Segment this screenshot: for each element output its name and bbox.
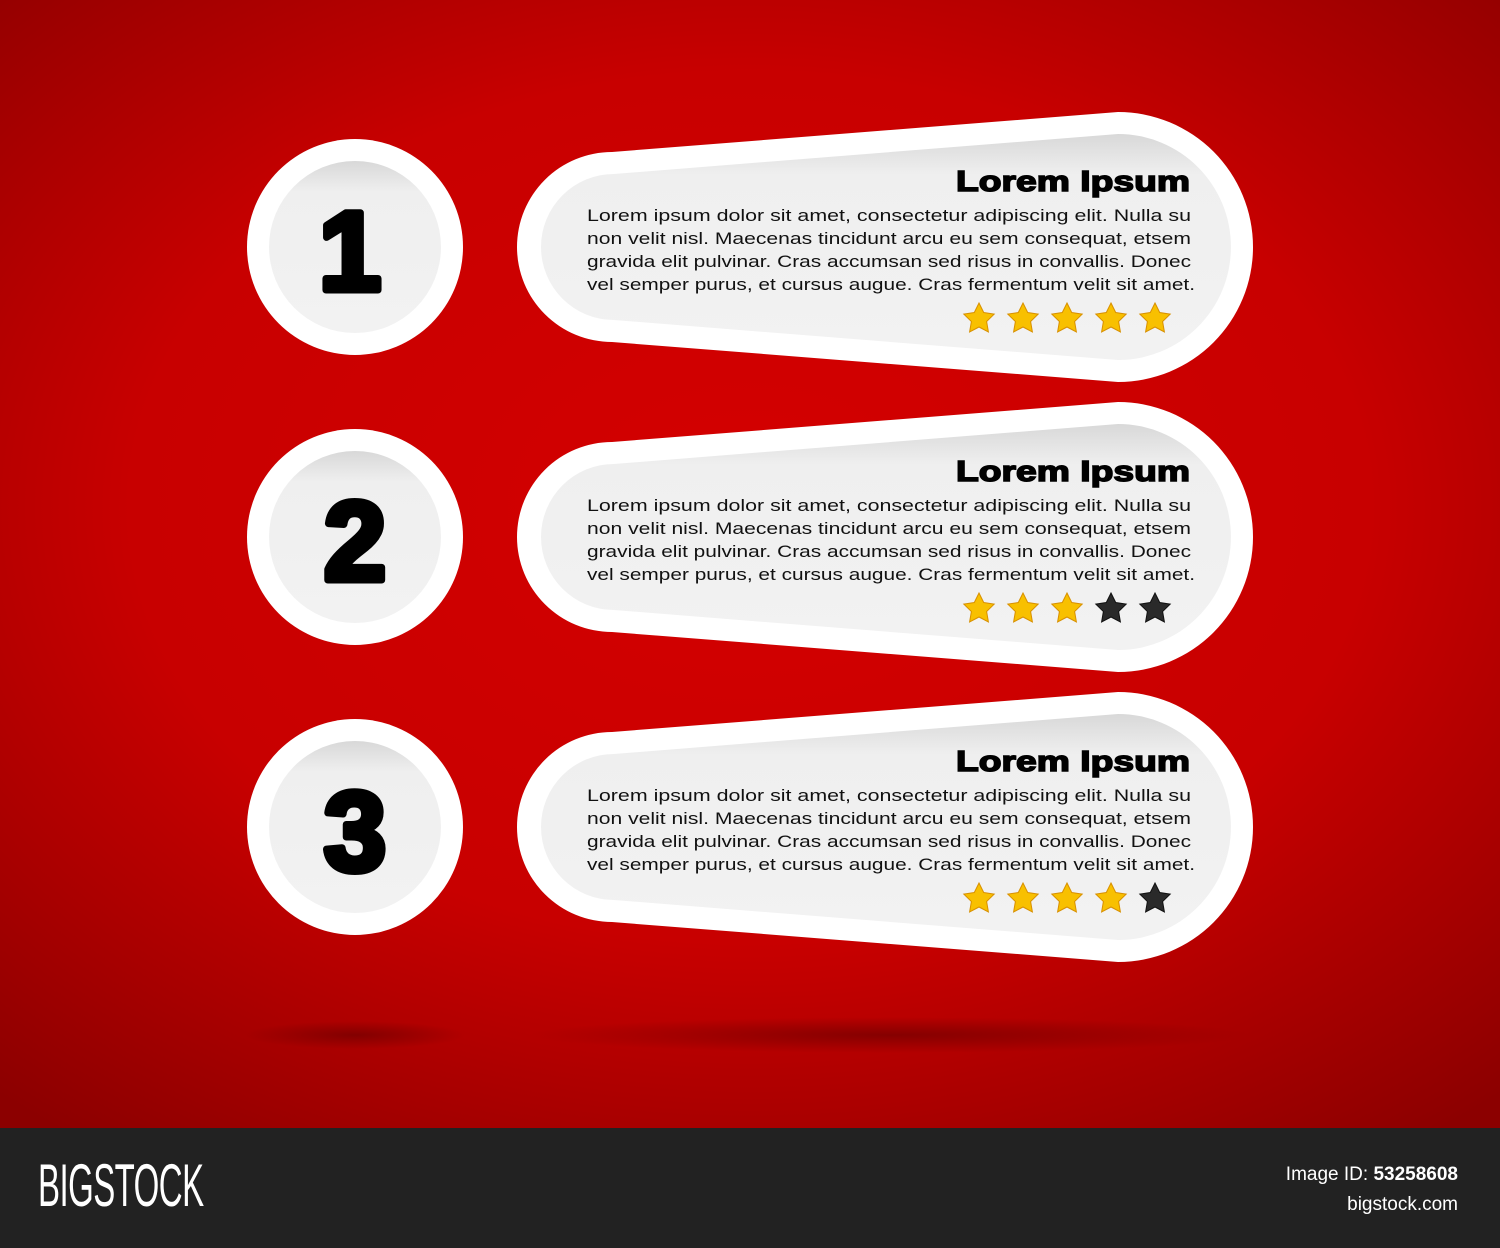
body text 2: vel semper purus, et cursus augue. Cras fermentum velit sit amet. <box>587 565 1195 584</box>
item 1 <box>247 112 1253 382</box>
body text 2: gravida elit pulvinar. Cras accumsan sed risus in convallis. Donec <box>587 542 1192 561</box>
footer image id: Image ID: 53258608 <box>1286 1164 1458 1185</box>
footer logo: BIGSTOCK <box>38 1152 204 1219</box>
body text 2: Lorem ipsum dolor sit amet, consectetur adipiscing elit. Nulla su <box>587 496 1191 515</box>
stars 1 <box>964 303 1170 332</box>
number 1: 1 <box>319 189 381 314</box>
heading 1: Lorem Ipsum <box>956 166 1190 198</box>
stars 2 <box>964 593 1170 622</box>
body text 1: gravida elit pulvinar. Cras accumsan sed risus in convallis. Donec <box>587 252 1192 271</box>
item 3 <box>247 692 1253 962</box>
footer image id: bigstock.com <box>1347 1194 1458 1215</box>
body text 3: vel semper purus, et cursus augue. Cras fermentum velit sit amet. <box>587 855 1195 874</box>
body text 1: Lorem ipsum dolor sit amet, consectetur adipiscing elit. Nulla su <box>587 206 1191 225</box>
body text 1: vel semper purus, et cursus augue. Cras fermentum velit sit amet. <box>587 275 1195 294</box>
number 3: 3 <box>324 769 386 894</box>
body text 1: non velit nisl. Maecenas tincidunt arcu eu sem consequat, etsem <box>587 229 1191 248</box>
body text 2: non velit nisl. Maecenas tincidunt arcu eu sem consequat, etsem <box>587 519 1191 538</box>
item 2 <box>247 402 1253 672</box>
stars 3 <box>964 883 1170 912</box>
footer image id <box>1286 1164 1458 1215</box>
body text 3: Lorem ipsum dolor sit amet, consectetur adipiscing elit. Nulla su <box>587 786 1191 805</box>
heading 3: Lorem Ipsum <box>956 746 1190 778</box>
body text 3: gravida elit pulvinar. Cras accumsan sed risus in convallis. Donec <box>587 832 1192 851</box>
footer <box>0 1128 1500 1248</box>
shadows <box>245 1017 1250 1053</box>
heading 2: Lorem Ipsum <box>956 456 1190 488</box>
number 2: 2 <box>324 479 386 604</box>
body text 3: non velit nisl. Maecenas tincidunt arcu eu sem consequat, etsem <box>587 809 1191 828</box>
